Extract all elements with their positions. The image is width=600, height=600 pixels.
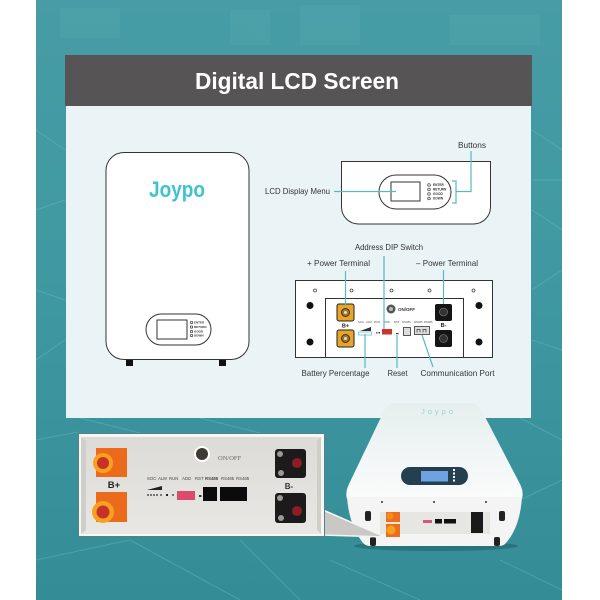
battery front drawing xyxy=(106,152,249,366)
port labels: RST xyxy=(394,320,400,324)
callout: LCD Display Menu xyxy=(265,187,396,196)
B- terminals: B- xyxy=(285,482,294,491)
terminal recess xyxy=(380,512,490,537)
port labels: RS485 xyxy=(221,476,235,481)
port labels: RS485 xyxy=(402,320,411,324)
on/off knob xyxy=(194,446,242,462)
LCD detail drawing: GOOD xyxy=(433,192,443,196)
small LCD control panel: GOOD xyxy=(194,330,204,334)
LCD detail drawing: ENTER xyxy=(433,183,445,187)
front face xyxy=(347,497,522,546)
negative terminals xyxy=(435,304,452,347)
labels: rear terminal: Battery Percentage xyxy=(302,369,370,378)
LCD detail drawing xyxy=(342,162,490,224)
negative terminals: B- xyxy=(441,323,447,329)
shadow xyxy=(354,541,518,551)
port labels xyxy=(147,476,250,481)
logo: Joypo: Joypo xyxy=(149,177,205,202)
port labels: RS485 xyxy=(414,320,423,324)
positive terminals xyxy=(337,304,354,347)
leader lines: rear terminal xyxy=(346,256,444,368)
LEDs, DIP switch, ports xyxy=(147,486,247,501)
callout: Buttons xyxy=(452,141,486,203)
connectors xyxy=(365,511,505,546)
LCD oval xyxy=(401,467,468,485)
B+ terminals: B+ xyxy=(108,480,121,491)
port labels: ALM xyxy=(158,476,167,481)
LCD detail drawing: DOWN xyxy=(433,196,444,200)
heading bar xyxy=(65,55,532,106)
LEDs and DIP switch xyxy=(358,326,430,336)
small LCD control panel: DOWN xyxy=(194,334,204,338)
B+ terminals xyxy=(92,448,127,523)
B- terminals xyxy=(275,449,306,523)
labels: rear terminal: Communication Port xyxy=(420,369,495,378)
port labels: ALM xyxy=(366,320,372,324)
port labels: ADD xyxy=(182,476,191,481)
labels: rear terminal: – Power Terminal xyxy=(416,259,478,268)
callout: Buttons: Buttons xyxy=(458,141,486,150)
port labels: ADD xyxy=(384,320,390,324)
top screws xyxy=(381,501,487,503)
callout: LCD Display Menu: LCD Display Menu xyxy=(265,187,330,196)
port labels: RS485 xyxy=(236,476,250,481)
zoomed terminal photo xyxy=(78,434,385,537)
labels: rear terminal: Reset xyxy=(388,369,408,378)
panel: Digital LCD Screen xyxy=(65,55,532,418)
callout wedge xyxy=(322,510,385,537)
port labels: SOC xyxy=(358,320,364,324)
labels: rear terminal: Address DIP Switch xyxy=(355,243,423,252)
small LCD control panel xyxy=(146,314,211,345)
battery photo xyxy=(346,403,523,551)
port labels: RS485 xyxy=(424,320,433,324)
port labels xyxy=(358,320,433,324)
small LCD control panel: ENTER xyxy=(194,320,205,324)
port labels: SOC xyxy=(147,476,156,481)
on/off switch xyxy=(386,304,415,314)
rear terminal drawing xyxy=(296,280,492,358)
on/off switch: ON/OFF xyxy=(398,307,415,312)
LCD detail drawing: RETURN xyxy=(433,188,447,192)
positive terminals: B+ xyxy=(342,324,349,330)
top face xyxy=(346,403,523,499)
port labels: RUN xyxy=(169,476,178,481)
port labels: RST xyxy=(195,476,204,481)
port labels: RUN xyxy=(374,320,380,324)
small LCD control panel: RETURN xyxy=(194,325,206,329)
logo: Joypo: Joypo xyxy=(421,407,453,416)
labels: rear terminal: + Power Terminal xyxy=(307,259,370,268)
labels: rear terminal xyxy=(302,243,495,378)
port labels: RS485 xyxy=(205,476,219,481)
on/off knob: ON/OFF xyxy=(218,455,242,462)
title: Digital LCD Screen xyxy=(195,68,399,94)
